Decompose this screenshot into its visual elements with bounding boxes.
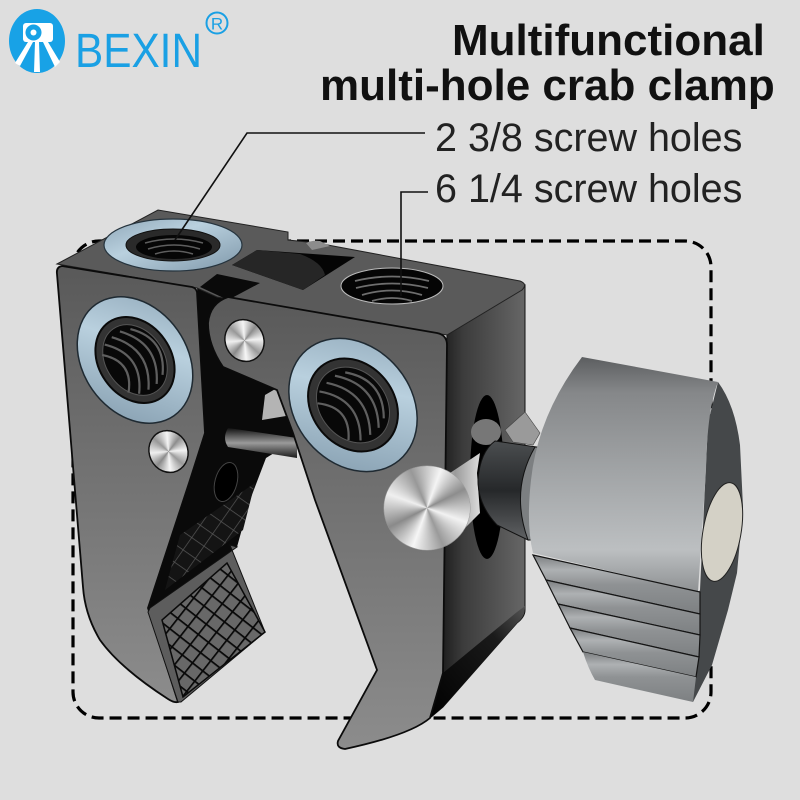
title: Multifunctional <box>452 16 765 65</box>
knob dark end cap <box>660 382 743 702</box>
knurled jaw pads <box>148 483 265 702</box>
crab clamp product illustration <box>53 210 749 749</box>
title: multi-hole crab clamp <box>320 61 775 110</box>
right clamp front plate <box>208 297 447 749</box>
leader line: 1/4 holes <box>401 192 428 296</box>
ring: left side hole <box>53 274 217 446</box>
screw head: upper <box>219 314 270 367</box>
ring: right plate hole <box>262 313 444 497</box>
registered mark: R <box>211 14 223 34</box>
T-screw handle <box>430 412 540 530</box>
knob shaft <box>478 441 537 540</box>
knob smooth body <box>529 357 718 592</box>
left clamp front plate <box>57 266 205 702</box>
knob collar <box>520 447 542 540</box>
label: 2 3/8 screw holes: 2 3/8 screw holes <box>435 116 742 160</box>
logo: BEXIN <box>9 9 228 78</box>
inner pivot and jaw mechanism <box>148 287 297 610</box>
screw head: lower <box>143 425 194 478</box>
slot in clamp side <box>470 395 504 559</box>
label: 6 1/4 screw holes: 6 1/4 screw holes <box>435 167 742 211</box>
hole: 3/8 top right <box>341 268 443 304</box>
T-screw disc head <box>384 466 470 550</box>
tension knob <box>529 357 749 702</box>
logo wordmark: BEXIN <box>75 25 202 78</box>
top notch <box>200 241 355 300</box>
icon: tripod camera badge <box>9 9 65 73</box>
dashed outline frame <box>73 241 711 718</box>
knob cream end insert <box>695 479 749 585</box>
leader line: 3/8 holes <box>175 133 425 240</box>
right body top and side faces <box>57 210 525 718</box>
title <box>320 16 775 110</box>
registered mark <box>206 12 228 34</box>
ring: top 3/8 hole <box>104 219 242 271</box>
knob ribs <box>533 555 700 702</box>
